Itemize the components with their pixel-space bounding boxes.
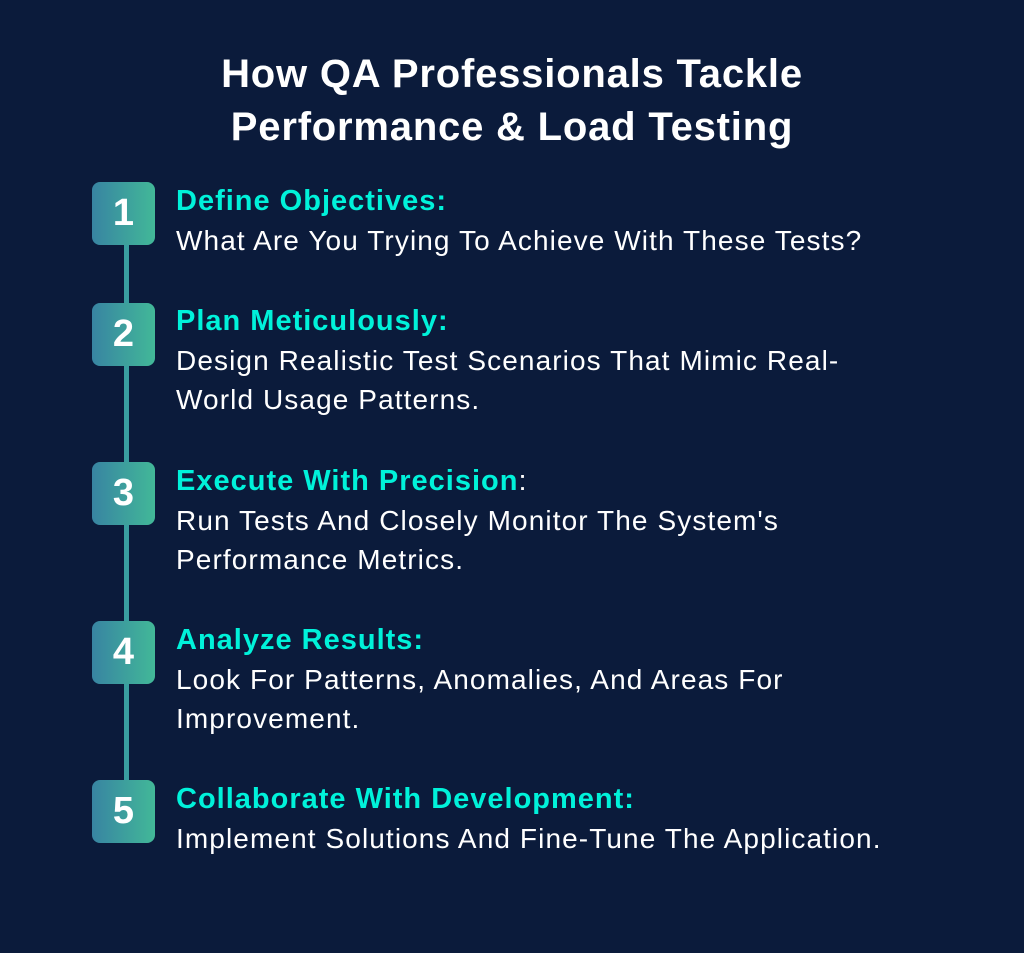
timeline connector xyxy=(124,240,129,790)
step 3 text xyxy=(176,465,779,575)
step 2 text xyxy=(176,305,839,415)
step 5 text xyxy=(176,783,882,854)
step 5 text: Implement Solutions And Fine-Tune The Application. xyxy=(176,823,882,854)
step 2 number: 2 xyxy=(113,313,134,355)
step 3 text: Performance Metrics. xyxy=(176,544,464,575)
step 4 text: Improvement. xyxy=(176,703,360,734)
step 2 number xyxy=(92,303,155,366)
step 5 number xyxy=(92,780,155,843)
step 2 text: Design Realistic Test Scenarios That Mimic Real- xyxy=(176,345,839,376)
step 3 text: Run Tests And Closely Monitor The System's xyxy=(176,505,779,536)
step 3 number: 3 xyxy=(113,472,134,514)
step 1 text: What Are You Trying To Achieve With These Tests? xyxy=(176,225,862,256)
title: Performance & Load Testing xyxy=(231,105,793,149)
step 1 number: 1 xyxy=(113,192,134,234)
step 1 text xyxy=(176,185,862,256)
step 5 text: Collaborate With Development: xyxy=(176,783,635,815)
step 3 number xyxy=(92,462,155,525)
step 3 text: Execute With Precision: xyxy=(176,465,528,497)
title xyxy=(221,52,803,149)
step 1 number xyxy=(92,182,155,245)
step 4 text: Look For Patterns, Anomalies, And Areas For xyxy=(176,664,784,695)
step 4 number xyxy=(92,621,155,684)
step 2 text: Plan Meticulously: xyxy=(176,305,449,337)
step 2 text: World Usage Patterns. xyxy=(176,384,480,415)
step 4 text xyxy=(176,624,784,734)
step 5 number: 5 xyxy=(113,790,134,832)
step 4 number: 4 xyxy=(113,631,134,673)
title: How QA Professionals Tackle xyxy=(221,52,803,96)
step 4 text: Analyze Results: xyxy=(176,624,424,656)
step 1 text: Define Objectives: xyxy=(176,185,447,217)
